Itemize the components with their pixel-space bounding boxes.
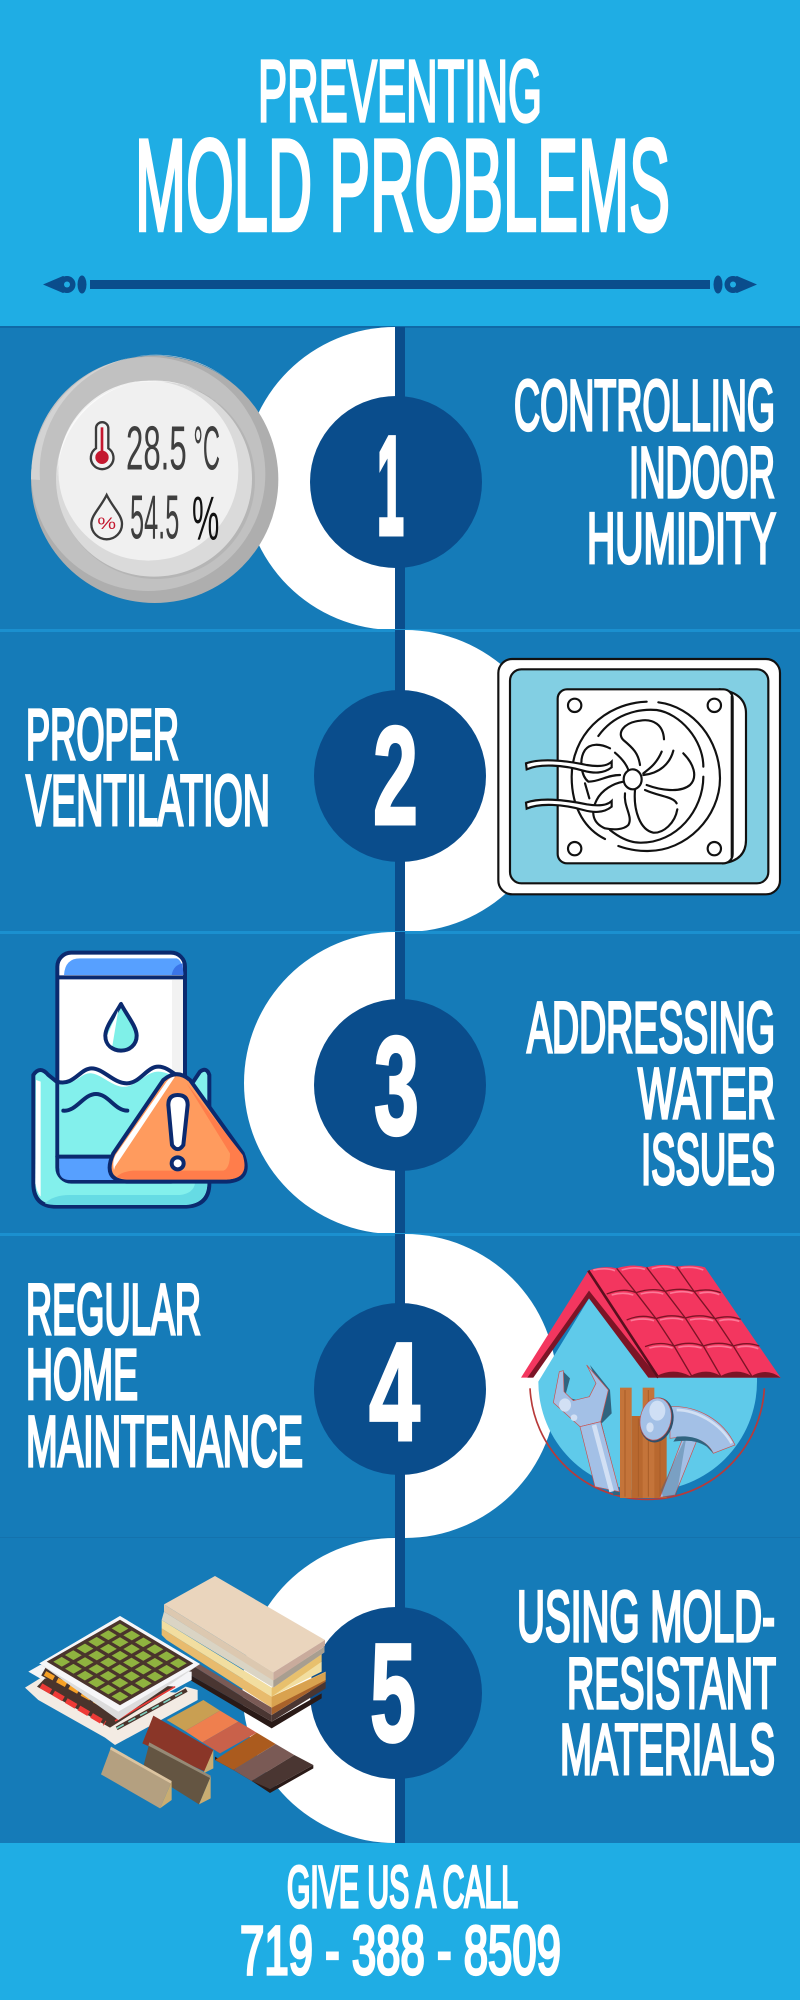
number badge 1 (310, 396, 482, 568)
number badge 4 (314, 1303, 486, 1475)
footer call to action (0, 1843, 800, 2000)
heading: regular home maintenance (26, 1271, 303, 1482)
heading: using mold-resistant materials (517, 1578, 776, 1790)
icon: exhaust fan (498, 659, 780, 894)
number badge 4: 4 (369, 1313, 420, 1470)
colored flat tile strip (167, 1700, 313, 1793)
icon: building material samples (25, 1576, 326, 1808)
heading: proper ventilation: PROPER (26, 696, 179, 775)
icon: thermostat hygrometer dial (31, 355, 278, 603)
footer phone number: 719 - 388 - 8509 (240, 1912, 561, 1989)
number badge 5 (310, 1607, 482, 1779)
thermometer glyph (91, 422, 113, 469)
icon: water leak warning (33, 953, 246, 1207)
wood planks (620, 1388, 667, 1498)
hammer (636, 1394, 735, 1497)
humidity droplet glyph: % (97, 514, 116, 533)
number badge 3 (314, 999, 486, 1171)
number badge 5: 5 (370, 1614, 416, 1771)
number badge 2: 2 (373, 697, 418, 854)
panel: step 4 regular home maintenance (0, 1233, 800, 1538)
wrench (553, 1365, 620, 1495)
icon: thermostat hygrometer dial: °C (193, 414, 220, 483)
ornamental divider (43, 276, 757, 294)
panel: step 1 controlling indoor humidity (0, 326, 800, 630)
icon: thermostat hygrometer dial: 54.5 (130, 484, 179, 553)
patterned floor tiles (25, 1616, 200, 1745)
heading: proper ventilation: VENTILATION (26, 762, 270, 841)
heading: regular home maintenance: REGULAR (26, 1271, 201, 1350)
number badge 3: 3 (374, 1007, 419, 1164)
panel: step 5 using mold-resistant materials (0, 1538, 800, 1843)
heading: controlling indoor humidity (514, 367, 776, 579)
panel: step 2 proper ventilation (0, 629, 800, 932)
icon: house with tools (521, 1265, 781, 1499)
footer line: give us a call: GIVE US A CALL (287, 1855, 518, 1920)
number badge 2 (314, 690, 486, 862)
humidity droplet glyph (91, 495, 122, 539)
temperature reading: 28.5 (126, 414, 187, 483)
wedge bricks (101, 1716, 213, 1808)
stacked boards (162, 1576, 326, 1728)
header panel (0, 0, 800, 327)
heading: regular home maintenance: HOME (26, 1336, 138, 1415)
roof (521, 1265, 781, 1378)
number badge 1: 1 (377, 407, 404, 564)
heading: regular home maintenance: MAINTENANCE (26, 1403, 303, 1482)
panel: step 3 addressing water issues (0, 931, 800, 1234)
icon: thermostat hygrometer dial: % (192, 484, 219, 553)
heading: addressing water issues (527, 989, 775, 1200)
heading: proper ventilation (26, 696, 270, 841)
